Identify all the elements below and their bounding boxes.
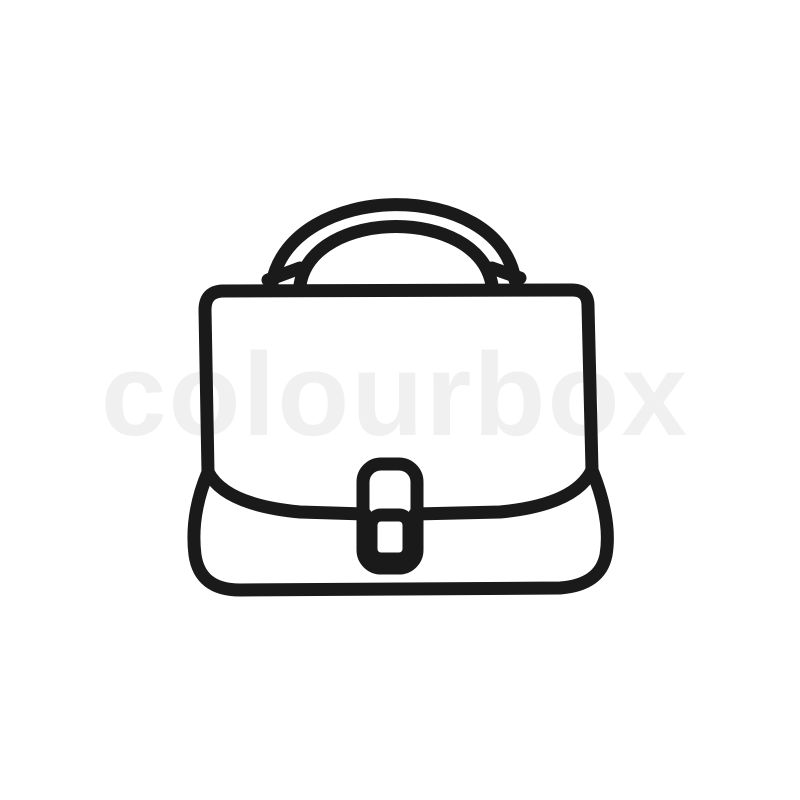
flap edge — [208, 470, 592, 514]
watermark text: colourbox — [101, 329, 689, 461]
handle — [268, 205, 520, 285]
clasp — [363, 464, 417, 568]
bag body — [194, 290, 607, 590]
icon: handbag — [194, 205, 607, 590]
